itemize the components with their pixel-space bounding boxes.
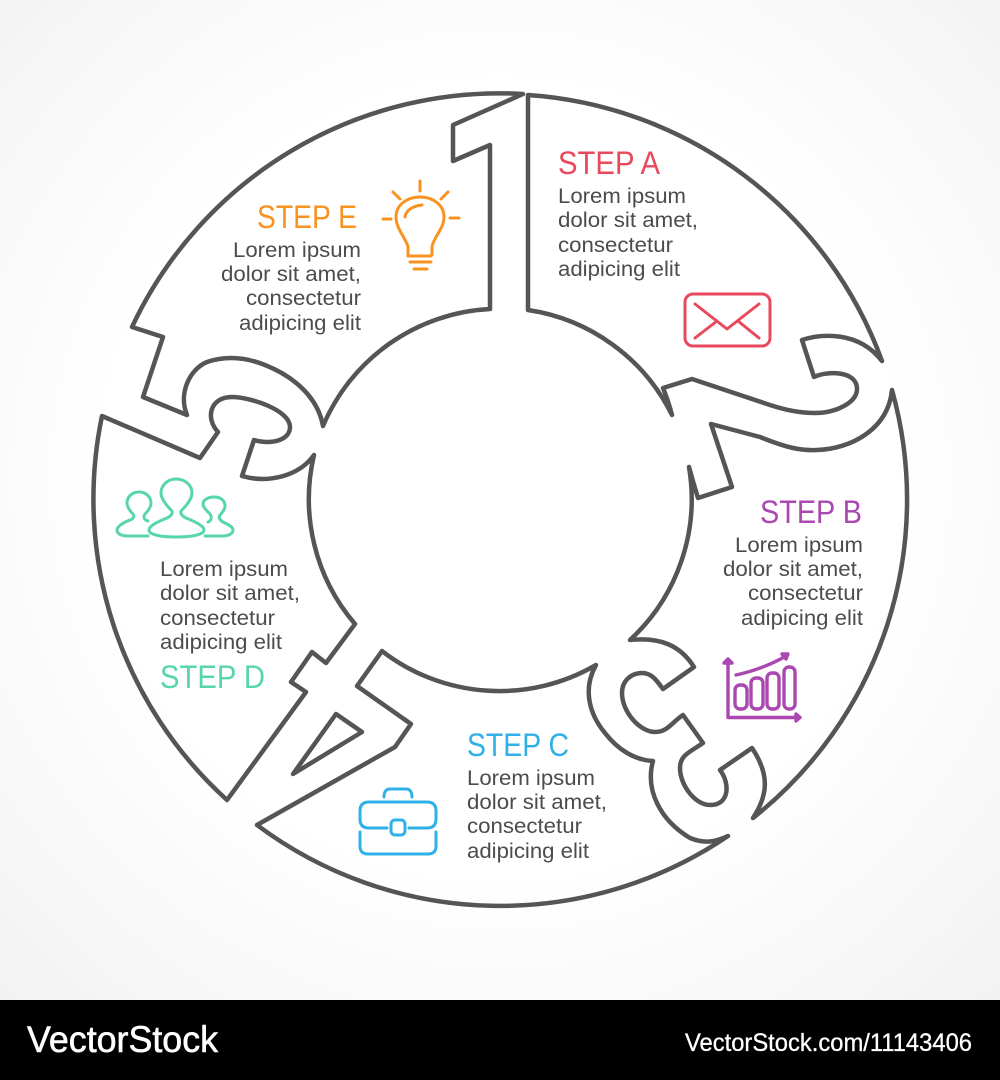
heading: step D: STEP D	[160, 659, 265, 695]
segment E outline	[132, 93, 523, 426]
segment C outline	[257, 651, 728, 906]
text block: step B: Lorem ipsum	[735, 533, 863, 557]
heading: step E: STEP E	[257, 199, 357, 235]
text block: step C: Lorem ipsum	[467, 766, 595, 790]
footer image id: VectorStock.com/11143406	[685, 1029, 972, 1057]
text block: step A: Lorem ipsum	[558, 184, 686, 208]
text block: step D: consectetur	[160, 606, 275, 630]
icon: bar chart	[724, 654, 800, 721]
text block: step B	[723, 494, 863, 630]
text block: step D: dolor sit amet,	[160, 581, 300, 605]
text block: step B: consectetur	[748, 581, 863, 605]
circular diagram: five interlocking numbered segments	[93, 93, 907, 906]
segment A outline	[528, 95, 882, 415]
icon: envelope	[685, 294, 770, 346]
segment C inner triangle	[293, 714, 362, 774]
icon: briefcase	[360, 789, 436, 854]
heading: step A: STEP A	[558, 145, 661, 181]
text block: step E: dolor sit amet,	[221, 262, 361, 286]
text block: step E: consectetur	[246, 286, 361, 310]
segment B outline	[622, 390, 907, 818]
footer band	[0, 1000, 1000, 1080]
text block: step E: adipicing elit	[239, 311, 361, 335]
icon: group of people	[117, 479, 233, 537]
text block: step C	[467, 727, 607, 863]
text block: step C: adipicing elit	[467, 839, 589, 863]
icon: light bulb	[383, 181, 459, 269]
text block: step B: adipicing elit	[741, 606, 863, 630]
text block: step A: adipicing elit	[558, 257, 680, 281]
text block: step D: adipicing elit	[160, 630, 282, 654]
text block: step A: consectetur	[558, 233, 673, 257]
text block: step D: Lorem ipsum	[160, 557, 288, 581]
text block: step A	[558, 145, 698, 281]
text block: step C: dolor sit amet,	[467, 790, 607, 814]
text block: step B: dolor sit amet,	[723, 557, 863, 581]
segment D outline	[93, 397, 355, 800]
footer logo wordmark: VectorStock	[27, 1019, 218, 1060]
text block: step A: dolor sit amet,	[558, 208, 698, 232]
heading: step B: STEP B	[760, 494, 862, 530]
heading: step C: STEP C	[467, 727, 569, 763]
text block: step D	[160, 557, 300, 695]
text block: step E	[221, 199, 361, 335]
text block: step E: Lorem ipsum	[233, 238, 361, 262]
text block: step C: consectetur	[467, 814, 582, 838]
